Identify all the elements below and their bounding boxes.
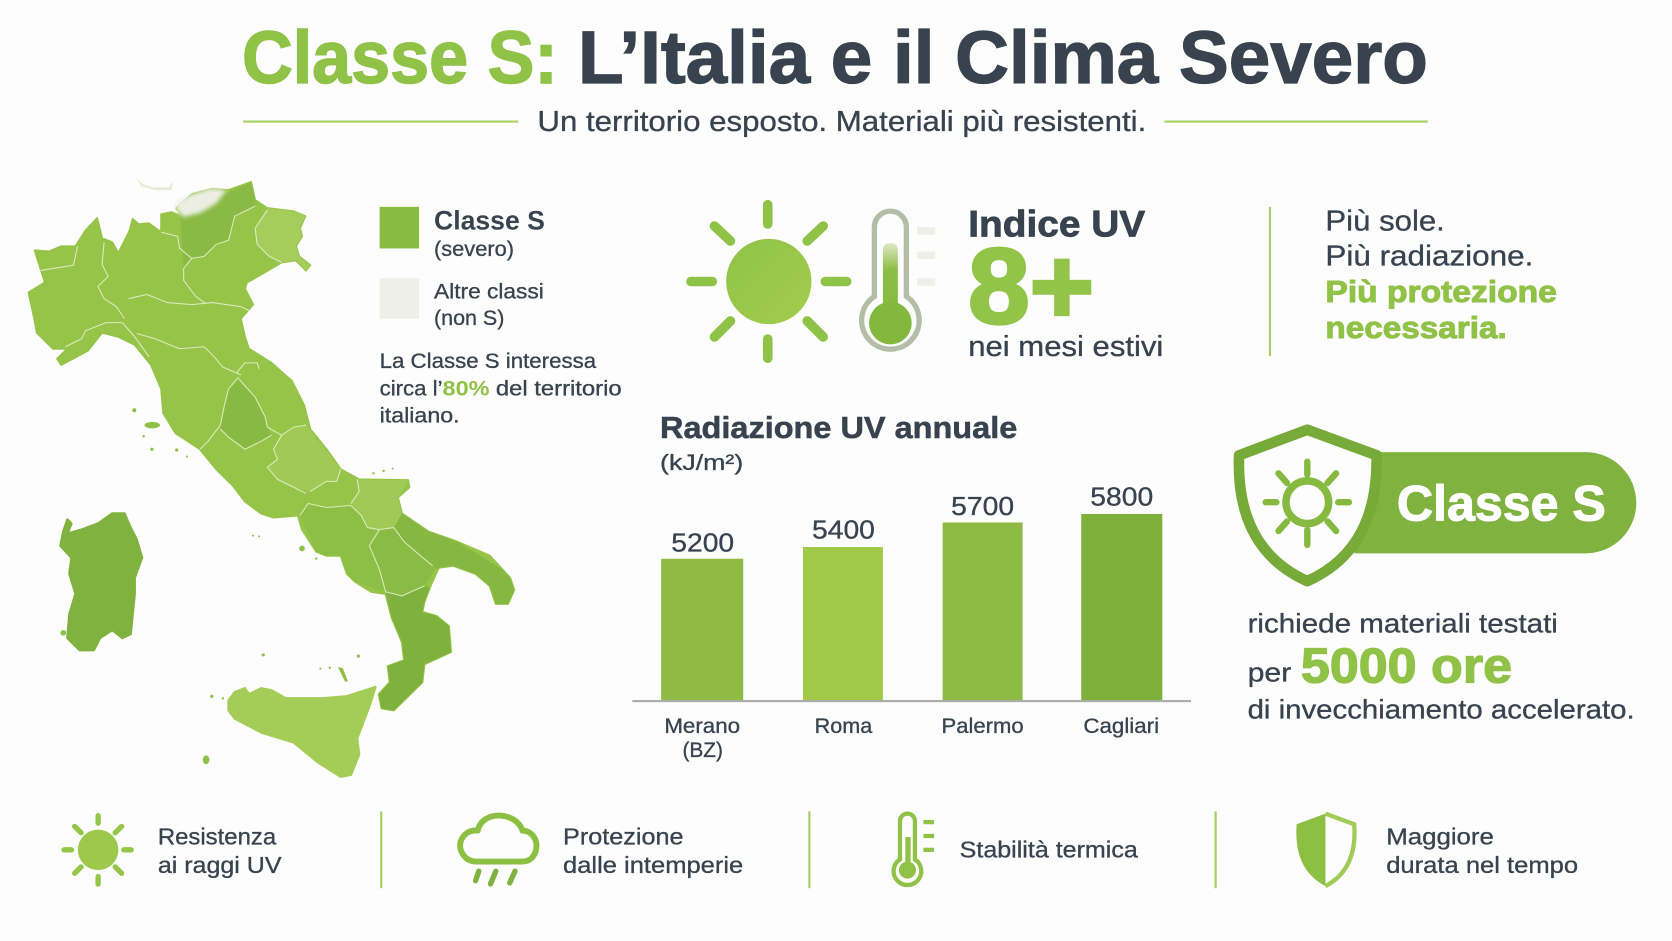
stat: UV index: Indice UV	[968, 203, 1145, 245]
benefit: UV resistance: Resistenza	[158, 824, 277, 850]
legend	[380, 205, 545, 330]
map note: La Classe S interessa	[380, 349, 596, 373]
icon: sun	[691, 205, 847, 358]
map of Italy	[29, 178, 516, 777]
island: Sardinia	[60, 514, 142, 650]
requirement text	[1248, 608, 1635, 725]
bar: Palermo: 5700	[951, 493, 1014, 521]
map note: 80%	[443, 377, 490, 401]
badge: Classe S shield: Classe S	[1397, 475, 1606, 531]
legend: Classe S: (severo)	[434, 237, 514, 261]
map note: italiano.	[380, 403, 460, 427]
chart heading: Radiazione UV annuale	[660, 410, 1017, 445]
bar chart: annual UV radiation	[632, 410, 1191, 762]
benefit: UV resistance: ai raggi UV	[158, 852, 282, 878]
bar: Palermo: Palermo	[942, 714, 1024, 738]
bar: Merano	[661, 529, 743, 762]
title: Classe S:	[242, 15, 558, 99]
requirement text: per	[1248, 657, 1291, 687]
regional shading	[180, 180, 516, 722]
benefit: durability: Maggiore	[1386, 824, 1494, 850]
legend: Classe S: Classe S	[434, 205, 545, 235]
bar: Merano: 5200	[671, 529, 734, 557]
bar: Merano: Merano	[664, 714, 740, 738]
map note	[380, 349, 622, 427]
stat: UV index: nei mesi estivi	[968, 331, 1163, 363]
callout: more protection: Più radiazione.	[1325, 241, 1533, 273]
chart heading: (kJ/m²)	[660, 450, 743, 475]
benefit: thermal stability: Stabilità termica	[960, 836, 1139, 862]
bar: Cagliari: 5800	[1090, 483, 1153, 511]
badge pill	[1354, 452, 1636, 553]
icon: rain cloud	[460, 816, 537, 884]
requirement text: 5000 ore	[1301, 639, 1512, 693]
shield sun	[1266, 462, 1349, 545]
bar: Roma	[803, 516, 883, 738]
icon: small sun	[64, 816, 131, 884]
callout: more protection: necessaria.	[1325, 310, 1507, 345]
legend: Altre classi	[380, 278, 544, 330]
bar: Cagliari: Cagliari	[1083, 714, 1159, 738]
benefit: thermal stability	[894, 814, 1139, 885]
benefit: UV resistance	[64, 816, 282, 884]
stat: UV index: 8+	[968, 226, 1094, 346]
benefit: weather protection: dalle intemperie	[563, 852, 743, 878]
mainland	[29, 182, 514, 710]
island: Sicily	[229, 687, 375, 777]
callout: more protection: Più sole.	[1325, 205, 1445, 237]
region boundaries	[41, 206, 433, 596]
icon: half shield	[1296, 814, 1355, 886]
icon: small thermometer	[894, 814, 934, 885]
subtitle with rules: Un territorio esposto. Materiali più resistenti.	[537, 106, 1146, 138]
benefit: durability	[1296, 814, 1578, 886]
vertical divider	[1269, 207, 1271, 356]
chart heading	[660, 410, 1017, 475]
legend: Altre classi: (non S)	[434, 306, 504, 330]
legend: Altre classi: Altre classi	[434, 280, 544, 304]
badge: Classe S shield	[1239, 430, 1636, 581]
bar: Merano: (BZ)	[682, 738, 723, 762]
stat: UV index	[968, 203, 1163, 363]
map note: del territorio	[496, 377, 622, 401]
benefit: durability: durata nel tempo	[1386, 852, 1578, 878]
requirement text: di invecchiamento accelerato.	[1248, 695, 1635, 725]
benefit: weather protection	[460, 816, 743, 884]
bar: Roma: 5400	[812, 516, 875, 544]
icon: thermometer	[862, 211, 935, 349]
legend: Classe S	[380, 205, 545, 261]
non-S zone	[176, 188, 227, 217]
bar: Palermo	[942, 493, 1024, 738]
shield	[1239, 430, 1377, 581]
requirement text: richiede materiali testati	[1248, 608, 1558, 638]
callout: more protection	[1325, 205, 1557, 345]
bar: Cagliari	[1081, 483, 1162, 738]
callout: more protection: Più protezione	[1325, 274, 1557, 309]
map note: circa l’	[380, 377, 443, 401]
benefit: weather protection: Protezione	[563, 824, 684, 850]
bar: Roma: Roma	[815, 714, 872, 738]
title: L’Italia e il Clima Severo	[578, 15, 1428, 99]
minor islands	[60, 408, 394, 764]
